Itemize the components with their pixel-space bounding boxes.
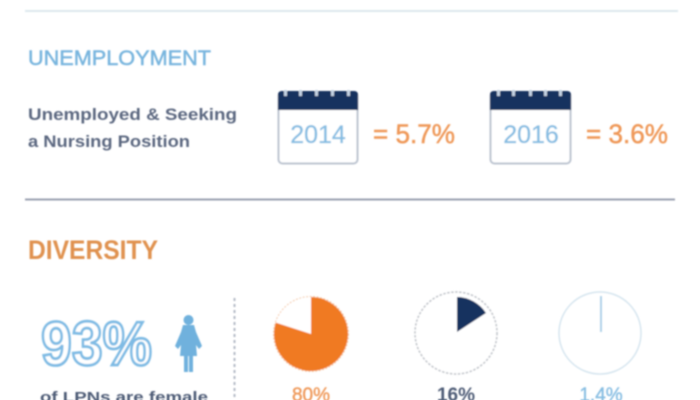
text: unemployed and seeking a nursing position: Unemployed & Seeking — [28, 105, 237, 124]
icon: calendar 2016: 2016 — [503, 121, 559, 149]
value: 2014 rate: = 5.7% — [373, 119, 455, 149]
icon: calendar 2014 — [278, 90, 358, 164]
chart: 16 percent pie — [415, 292, 497, 374]
text: unemployed and seeking a nursing position — [28, 105, 237, 151]
icon: calendar 2016 — [490, 90, 571, 164]
chart: 80 percent pie — [274, 296, 348, 372]
heading: diversity: DIVERSITY — [28, 235, 158, 265]
heading: unemployment: UNEMPLOYMENT — [28, 47, 211, 70]
icon: female figure — [175, 315, 202, 372]
value: 2016 rate: = 3.6% — [586, 119, 668, 149]
chart: 1.4 percent pie — [559, 292, 641, 374]
text: unemployed and seeking a nursing position: a Nursing Position — [28, 132, 190, 151]
stat: 93 percent female: 93% — [41, 310, 152, 379]
icon: calendar 2014: 2014 — [290, 121, 346, 149]
